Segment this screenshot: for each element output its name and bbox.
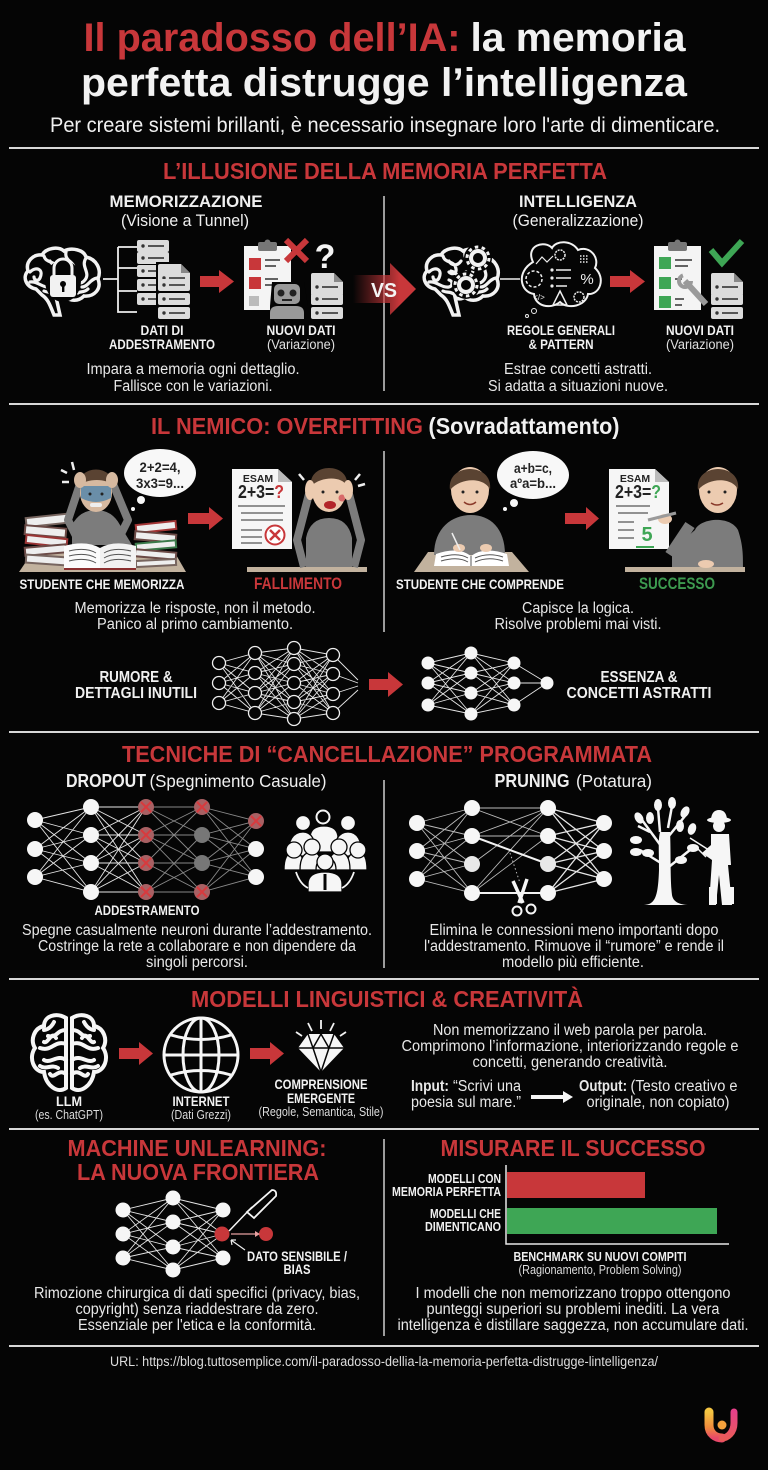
label: nuovi dati — [266, 322, 336, 352]
label: regole generali: & PATTERN — [528, 336, 594, 352]
label: dati di addestramento: DATI DI — [140, 322, 184, 338]
text: intelligenza summary: Si adatta a situazioni nuove. — [488, 378, 668, 395]
label: LLM: (es. ChatGPT) — [35, 1108, 103, 1122]
heading: intelligenza: (Generalizzazione) — [512, 211, 644, 230]
text: failure summary: Memorizza le risposte, non il metodo. — [74, 600, 316, 617]
heading: machine unlearning: MACHINE UNLEARNING: — [68, 1135, 326, 1161]
label: nuovi dati: NUOVI DATI — [666, 322, 734, 338]
text: input example: poesia sul mare.” — [411, 1094, 521, 1111]
arrow: VS — [353, 263, 416, 315]
text: memorizzazione summary — [86, 361, 300, 395]
label: regole generali — [507, 322, 615, 352]
text: dropout description: Costringe la rete a collaborare e non dipendere da — [38, 938, 356, 955]
arrow — [200, 270, 234, 293]
axis caption: BENCHMARK SU NUOVI COMPITI — [514, 1249, 686, 1264]
arrow: VS: VS — [371, 280, 397, 302]
bar label: dimenticano: DIMENTICANO — [425, 1220, 501, 1234]
text: dropout description — [22, 922, 372, 971]
label: successo: SUCCESSO — [639, 574, 715, 593]
text: failure summary — [74, 600, 316, 633]
label: nuovi dati: NUOVI DATI — [266, 322, 336, 338]
title: perfetta distrugge l’intelligenza — [81, 61, 688, 105]
panel: overfitting — [19, 413, 745, 726]
text: models description: Comprimono l’informazione, interiorizzando regole e — [402, 1038, 738, 1055]
text: dropout description: Spegne casualmente neuroni durante l’addestramento. — [22, 922, 372, 939]
heading: modelli linguistici: MODELLI LINGUISTICI & CREATIVITÀ — [191, 985, 583, 1012]
icon: training data tree — [103, 240, 192, 321]
axis caption: (Ragionamento, Problem Solving) — [518, 1263, 682, 1277]
title — [81, 16, 688, 105]
label: rumore: DETTAGLI INUTILI — [75, 685, 197, 702]
arrow — [610, 270, 645, 293]
text: success description: I modelli che non memorizzano troppo ottengono — [416, 1285, 730, 1302]
text: output example: Output: — [579, 1078, 627, 1095]
heading: intelligenza: INTELLIGENZA — [519, 192, 637, 211]
text: unlearning description: Rimozione chirurgica di dati specifici (privacy, bias, — [34, 1285, 360, 1302]
text: input example — [411, 1078, 521, 1111]
heading: illusione: L’ILLUSIONE DELLA MEMORIA PERFETTA — [163, 158, 607, 184]
illustration: failed exam: 2+3=? — [238, 482, 284, 502]
arrow — [188, 507, 223, 530]
label: dato sensibile: BIAS — [284, 1261, 310, 1277]
heading: dropout — [66, 771, 326, 791]
text: output example: (Testo creativo e — [630, 1078, 738, 1095]
icon: brain with gears — [424, 244, 520, 315]
heading: dropout: (Spegnimento Casuale) — [150, 771, 326, 791]
text: failure summary: Panico al primo cambiamento. — [97, 616, 293, 633]
axis caption — [514, 1249, 686, 1277]
label: rumore — [75, 669, 197, 702]
label: essenza: CONCETTI ASTRATTI — [566, 685, 712, 702]
icon: globe — [164, 1018, 238, 1092]
text: dropout description: singoli percorsi. — [146, 954, 248, 971]
label: studente che comprende: STUDENTE CHE COMPRENDE — [396, 576, 564, 592]
label: addestramento: ADDESTRAMENTO — [94, 902, 200, 918]
label: comprensione emergente: COMPRENSIONE — [274, 1076, 368, 1092]
label: dati di addestramento — [109, 322, 215, 352]
label: rumore: RUMORE & — [100, 669, 172, 686]
label: LLM: LLM — [56, 1093, 82, 1109]
heading: machine unlearning — [68, 1135, 326, 1185]
bar chart — [392, 1165, 729, 1244]
text: success description: punteggi superiori su problemi inediti. La vera — [426, 1301, 720, 1318]
source URL: URL: https://blog.tuttosemplice.com/il-paradosso-dellia-la-memoria-perfetta-distrugge-lintelligenza/ — [110, 1354, 658, 1369]
label: internet: (Dati Grezzi) — [171, 1108, 231, 1122]
icon: thought cloud of patterns: % — [580, 271, 594, 288]
heading: tecniche: TECNICHE DI “CANCELLAZIONE” PROGRAMMATA — [122, 741, 652, 767]
label: internet — [171, 1093, 231, 1122]
panel: tecniche di cancellazione — [22, 741, 734, 971]
text: memorizzazione summary: Impara a memoria ogni dettaglio. — [86, 361, 300, 378]
text: pruning description — [424, 922, 724, 971]
text: models description: Non memorizzano il web parola per parola. — [433, 1022, 707, 1039]
text: output example — [579, 1078, 738, 1111]
label: dato sensibile: DATO SENSIBILE / — [247, 1248, 347, 1264]
panel: machine unlearning — [34, 1135, 384, 1336]
panel: modelli linguistici — [32, 985, 739, 1122]
text: models description — [402, 1022, 738, 1071]
title: Il paradosso dell’IA: — [84, 16, 460, 60]
text: success description: intelligenza è distillare saggezza, non accumulare dati. — [398, 1317, 748, 1334]
illustration: failed exam — [232, 468, 367, 572]
icon: thought cloud of patterns — [522, 242, 601, 318]
subtitle: Per creare sistemi brillanti, è necessario insegnare loro l'arte di dimenticare. — [50, 114, 720, 137]
heading: memorizzazione: MEMORIZZAZIONE — [110, 192, 262, 211]
heading: machine unlearning: LA NUOVA FRONTIERA — [77, 1159, 319, 1185]
label: LLM — [35, 1093, 103, 1122]
arrow — [119, 1042, 153, 1065]
text: success description — [398, 1285, 748, 1334]
label: internet: INTERNET — [172, 1093, 230, 1109]
text: thought bubble: 3x3=9... — [136, 475, 184, 491]
arrow: input to output — [531, 1091, 573, 1103]
text: unlearning description — [34, 1285, 360, 1334]
icon: passing clipboard and wrench — [654, 240, 743, 319]
illustration: passed exam: 2+3=? — [615, 482, 661, 502]
text: memorizzazione summary: Fallisce con le variazioni. — [114, 378, 272, 395]
label: nuovi dati: (Variazione) — [666, 337, 734, 352]
heading: overfitting — [151, 413, 620, 439]
bar label: memoria perfetta — [392, 1172, 501, 1199]
icon: tree — [630, 797, 699, 905]
text: thought bubble: 2+2=4, — [140, 459, 180, 475]
icon: failing clipboard and robot — [244, 238, 343, 321]
icon: gardener — [690, 810, 734, 905]
label: nuovi dati: (Variazione) — [267, 337, 335, 352]
icon: diamond — [296, 1020, 346, 1072]
diagram: simplified network — [422, 646, 554, 720]
heading: misurare il successo: MISURARE IL SUCCESSO — [440, 1135, 706, 1161]
text: pruning description: modello più efficiente. — [502, 954, 644, 971]
heading: overfitting: (Sovradattamento) — [428, 413, 620, 439]
bar label: dimenticano — [425, 1207, 501, 1234]
text: unlearning description: copyright) senza riaddestrare da zero. — [76, 1301, 318, 1318]
label: dati di addestramento: ADDESTRAMENTO — [109, 336, 215, 352]
illustration: failed exam: ESAM — [243, 473, 273, 485]
text: success summary — [494, 600, 662, 633]
text: pruning description: l'addestramento. Rimuove il “rumore” e rende il — [424, 938, 724, 955]
arrow — [369, 672, 403, 697]
diagram: pruned network — [409, 800, 612, 901]
heading: pruning: PRUNING — [494, 771, 570, 791]
illustration: panicking student with books — [19, 449, 196, 572]
text: success summary: Risolve problemi mai visti. — [494, 616, 662, 633]
icon: collaborating team — [284, 810, 367, 892]
text: output example: originale, non copiato) — [586, 1094, 730, 1111]
text: intelligenza summary: Estrae concetti astratti. — [504, 361, 652, 378]
label: studente che memorizza: STUDENTE CHE MEMORIZZA — [20, 576, 184, 592]
heading: memorizzazione — [110, 192, 262, 230]
diagram: unlearning network — [116, 1190, 276, 1278]
illustration: passed exam: ESAM — [620, 473, 650, 485]
label: comprensione emergente: (Regole, Semantica, Stile) — [258, 1105, 384, 1119]
text: thought bubble: aºa=b... — [510, 475, 556, 491]
diagram: dropout network — [27, 799, 264, 900]
label: comprensione emergente — [258, 1076, 384, 1119]
label: regole generali: REGOLE GENERALI — [507, 322, 615, 338]
text: input example: Input: — [411, 1078, 449, 1095]
heading: pruning: (Potatura) — [576, 771, 652, 791]
icon: scissors — [512, 879, 536, 916]
arrow — [250, 1042, 284, 1065]
panel: l'illusione della memoria perfetta — [25, 158, 743, 395]
illustration: passed exam: 5 — [641, 524, 653, 546]
logo — [709, 1412, 734, 1438]
bar label: memoria perfetta: MEMORIA PERFETTA — [392, 1185, 501, 1199]
heading: dropout: DROPOUT — [66, 771, 146, 791]
text: success summary: Capisce la logica. — [522, 600, 634, 617]
text: thought bubble — [510, 460, 556, 491]
heading: intelligenza — [512, 192, 644, 230]
heading: memorizzazione: (Visione a Tunnel) — [121, 211, 249, 230]
icon: brain with lock — [25, 248, 99, 315]
diagram: overfit network — [212, 642, 358, 726]
text: thought bubble — [136, 459, 184, 491]
icon: thought cloud of patterns: </> — [533, 293, 545, 302]
heading: overfitting: IL NEMICO: OVERFITTING — [151, 413, 423, 439]
arrow — [565, 507, 599, 530]
bar label: memoria perfetta: MODELLI CON — [428, 1172, 501, 1186]
illustration: passed exam — [609, 467, 745, 572]
title: la memoria — [470, 16, 686, 60]
icon: LLM brain — [32, 1015, 106, 1090]
illustration: understanding student — [414, 451, 569, 572]
label: essenza — [566, 669, 712, 702]
text: thought bubble: a+b=c, — [514, 460, 552, 476]
label: nuovi dati — [666, 322, 734, 352]
bar label: dimenticano: MODELLI CHE — [430, 1207, 501, 1221]
label: fallimento: FALLIMENTO — [254, 574, 342, 593]
text: models description: concetti, generando creatività. — [472, 1054, 668, 1071]
text: unlearning description: Essenziale per l'etica e la conformità. — [78, 1317, 316, 1334]
label: comprensione emergente: EMERGENTE — [287, 1090, 355, 1106]
text: pruning description: Elimina le connessioni meno importanti dopo — [430, 922, 718, 939]
text: intelligenza summary — [488, 361, 668, 395]
label: essenza: ESSENZA & — [600, 669, 678, 686]
label: dato sensibile — [247, 1248, 347, 1277]
heading: pruning — [494, 771, 652, 791]
panel: misurare il successo — [392, 1135, 748, 1334]
icon: failing clipboard and robot: ? — [315, 238, 335, 276]
text: input example: “Scrivi una — [453, 1078, 521, 1095]
